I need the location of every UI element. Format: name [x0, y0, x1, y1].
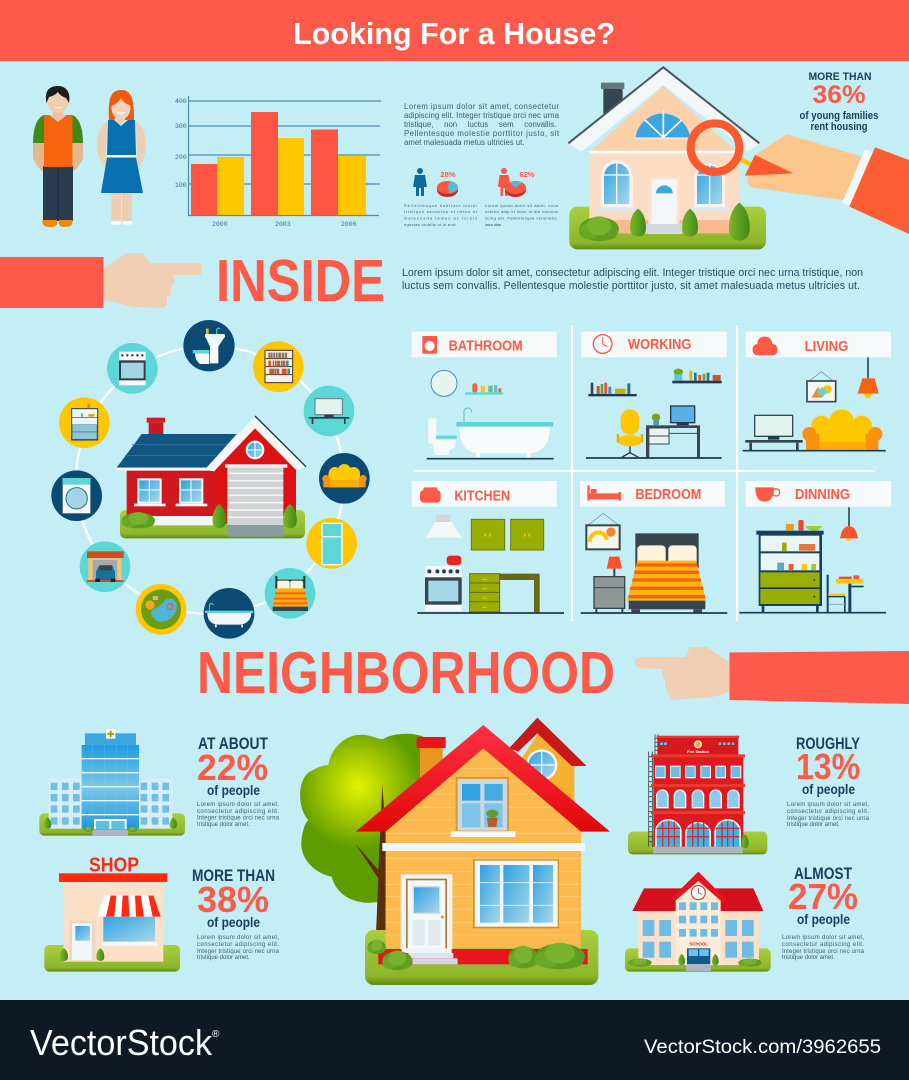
door	[401, 874, 452, 949]
white trim band	[382, 843, 585, 851]
stove	[425, 556, 462, 611]
mirror	[431, 370, 457, 396]
label	[746, 481, 891, 507]
bar chart: 100	[175, 182, 187, 189]
pendant lamp	[858, 357, 879, 398]
illustration: red house	[116, 416, 306, 538]
red foundation	[378, 949, 588, 964]
building: shop: SHOP	[89, 854, 139, 877]
icon: washing machine	[51, 470, 102, 521]
icon: bed	[265, 568, 315, 619]
back gable	[509, 718, 587, 802]
chair and table	[828, 575, 864, 613]
lawn	[569, 207, 766, 249]
bed	[627, 533, 706, 613]
stat: 36 percent rent: MORE THAN	[808, 71, 872, 83]
icon: garage with car	[80, 541, 130, 592]
icon: stove	[107, 343, 158, 394]
hand and sleeve	[745, 134, 909, 234]
stat: 28 percent female: egestas orvallis ut id erat.	[404, 222, 457, 227]
magnifier	[691, 123, 752, 172]
panel: living	[743, 332, 891, 451]
stat: 28 percent female: Pellentesque habitant morbi	[404, 203, 477, 208]
stat: 13 percent: consectetur adipiscing elit.	[787, 809, 869, 815]
text block: intro	[404, 102, 560, 147]
illustration: main yellow house with tree	[300, 718, 610, 985]
label: DINNING	[795, 487, 850, 503]
stat: 27 percent: Lorem ipsum dolor sit amet,	[782, 935, 864, 941]
stat: 13 percent	[787, 735, 870, 828]
roof	[568, 67, 759, 152]
building: school: SCHOOL	[689, 942, 708, 947]
stat: 36 percent rent: 36%	[812, 81, 866, 109]
panel: dinning	[739, 481, 891, 613]
stat: 22 percent: Lorem ipsum dolor sit amet,	[197, 802, 279, 808]
label: WORKING	[628, 337, 691, 353]
lawn	[365, 930, 598, 985]
icon: sofa	[319, 453, 370, 504]
stat: 22 percent: AT ABOUT	[198, 735, 268, 753]
label: BATHROOM	[449, 338, 523, 354]
stat: 22 percent: tristique dolor amet.	[197, 822, 250, 828]
stat: 62 percent male: scing elit. Pellentesque venenatis,	[485, 216, 558, 220]
stat: 13 percent: ROUGHLY	[796, 735, 860, 753]
stat: 62 percent male: lacus vitae.	[485, 222, 502, 227]
figure: man	[33, 86, 83, 227]
tv	[745, 415, 803, 451]
stat: 62 percent male: Lorem ipsum dolor sit amet, cons	[485, 203, 558, 208]
stat: 28 percent female: tristique senectus et netus et	[404, 209, 478, 214]
stat: 38 percent: consectetur adipiscing elit.	[197, 942, 279, 948]
roof	[356, 725, 610, 832]
large window	[473, 859, 559, 928]
desk and monitor	[646, 406, 700, 458]
label: LIVING	[805, 339, 848, 355]
label	[746, 332, 891, 357]
label: BEDROOM	[635, 487, 701, 503]
illustration: house under magnifier	[568, 67, 909, 249]
wall cabinets	[471, 519, 544, 550]
bushes	[367, 940, 386, 954]
chair	[617, 409, 643, 457]
stat: 27 percent: 27%	[788, 876, 858, 917]
toilet and bath	[428, 408, 553, 458]
stat: 62 percent male: ectetur adip et dolor ut dui rhoncus	[485, 209, 558, 214]
building: fire station: Fire Station	[687, 749, 710, 754]
windows	[596, 160, 730, 212]
stat: 36 percent rent: rent housing	[810, 121, 868, 133]
picture	[807, 372, 836, 402]
stat: 27 percent: consectetur adipiscing elit.	[782, 942, 864, 948]
stat: 38 percent: 38%	[197, 879, 269, 920]
label	[581, 332, 727, 357]
building: shop	[44, 854, 180, 972]
heading: neighborhood: NEIGHBORHOOD	[197, 640, 615, 706]
stat: 13 percent: 13%	[796, 746, 860, 787]
range hood	[426, 515, 462, 538]
icon: pool	[136, 584, 186, 635]
stat: 13 percent: Lorem ipsum dolor sit amet,	[787, 802, 869, 808]
heading: inside: INSIDE	[216, 248, 385, 314]
text block: intro: tristique, non luctus sem convallis.	[404, 120, 556, 129]
stat: 27 percent: ALMOST	[794, 865, 852, 883]
label	[412, 332, 557, 357]
icon: sink and toilet	[183, 320, 235, 371]
bar chart: 2000	[212, 221, 228, 228]
text block: intro: Pellentesque molestie porttitor justo, sit	[404, 129, 560, 138]
icon: dresser	[59, 397, 110, 448]
stat: 28 percent female: malesuada fames ac turpis	[404, 216, 477, 220]
title banner: Looking For a House?	[293, 16, 615, 51]
panel: kitchen	[412, 481, 564, 613]
icon: bathtub	[204, 588, 254, 639]
stat: 22 percent	[197, 735, 280, 828]
stat: 62 percent male	[485, 168, 558, 227]
bookshelves	[588, 369, 722, 396]
walls	[386, 745, 581, 948]
text block: inside description	[402, 267, 863, 292]
chimney	[601, 83, 624, 117]
stat: 38 percent: of people	[207, 914, 260, 930]
footer: watermark bar: VectorStock.com/3962655	[644, 1037, 881, 1058]
pendant lamp	[840, 507, 858, 541]
stat: 38 percent: Lorem ipsum dolor sit amet,	[197, 935, 279, 941]
door and steps	[646, 177, 682, 234]
label: KITCHEN	[454, 488, 510, 504]
icon: bookshelf	[253, 341, 304, 392]
text block: intro: Lorem ipsum dolor sit amet, consectetur	[404, 102, 559, 111]
bar chart: 200	[175, 154, 187, 161]
label	[412, 481, 557, 507]
bar chart: 400	[175, 98, 187, 105]
panel: bedroom	[580, 481, 727, 613]
tree	[300, 734, 423, 942]
stat: 27 percent: of people	[797, 911, 850, 927]
stat: 22 percent: Integer tristique orci nec urna	[197, 816, 280, 822]
footer: watermark bar: VectorStock	[30, 1022, 213, 1063]
stat: 13 percent: tristique dolor amet.	[787, 822, 840, 828]
arrow: hand pointing right	[0, 253, 202, 308]
shrubs	[579, 216, 619, 241]
upper window	[451, 777, 515, 837]
cabinet	[756, 520, 824, 612]
panel: working	[581, 332, 727, 458]
stat: 38 percent: tristique dolor amet.	[197, 955, 250, 961]
bar chart	[175, 96, 381, 228]
stat: 22 percent: consectetur adipiscing elit.	[197, 809, 279, 815]
shelf	[465, 383, 503, 395]
building: fire station	[628, 734, 767, 854]
panel: bathroom	[412, 332, 557, 459]
stat: 36 percent rent	[800, 71, 878, 133]
footer: watermark bar: ®	[212, 1029, 220, 1040]
diagram: home icon ring	[51, 320, 370, 639]
icon: fridge	[306, 518, 357, 569]
stat: 27 percent: Integer tristique orci nec urna	[782, 949, 865, 955]
stat: 38 percent: Integer tristique orci nec urna	[197, 949, 280, 955]
stat: 36 percent rent: of young families	[800, 110, 878, 122]
figure: woman	[97, 90, 146, 224]
stat: 22 percent: 22%	[197, 747, 268, 788]
text block: inside description: luctus sem convallis. Pellentesque molestie porttitor justo, sit amet malesuada metus ultricies ut.	[402, 280, 860, 292]
bar chart: 2003	[275, 221, 291, 228]
stat: 22 percent: of people	[207, 782, 260, 798]
panel: room grid dividers	[413, 325, 875, 621]
text block: intro: amet malesuada metus ultricies ut.	[404, 138, 524, 147]
steps	[402, 948, 458, 964]
bar chart: 300	[175, 123, 187, 130]
icon: tv	[304, 386, 354, 436]
stat: 38 percent	[192, 867, 280, 961]
stat: 27 percent: tristique dolor amet.	[782, 955, 835, 961]
stat: 28 percent female	[404, 168, 478, 227]
building: school	[625, 872, 771, 972]
footer: watermark bar	[0, 1000, 909, 1080]
building: hospital	[39, 729, 185, 836]
stat: 62 percent male: 62%	[519, 170, 535, 179]
arched window	[633, 109, 692, 139]
bar chart: 2006	[341, 221, 357, 228]
title banner	[0, 0, 909, 61]
stat: 13 percent: Integer tristique orci nec urna	[787, 816, 870, 822]
bedside lamp and nightstand	[594, 557, 625, 612]
text block: intro: adipiscing elit. Integer tristique orci nec urna	[404, 111, 560, 120]
stat: 27 percent	[782, 865, 865, 961]
picture	[586, 513, 620, 549]
desk with drawers	[470, 574, 540, 612]
text block: inside description: Lorem ipsum dolor sit amet, consectetur adipiscing elit. Integer tristique orci nec urna tristique, non	[402, 267, 863, 279]
stat: 13 percent: of people	[802, 781, 855, 797]
chimney	[417, 737, 446, 778]
label	[580, 481, 725, 507]
sofa	[802, 409, 882, 450]
stat: 38 percent: MORE THAN	[192, 867, 275, 885]
arrow: hand pointing left	[635, 647, 909, 704]
stat: 28 percent female: 28%	[440, 170, 456, 179]
house walls	[589, 86, 740, 233]
